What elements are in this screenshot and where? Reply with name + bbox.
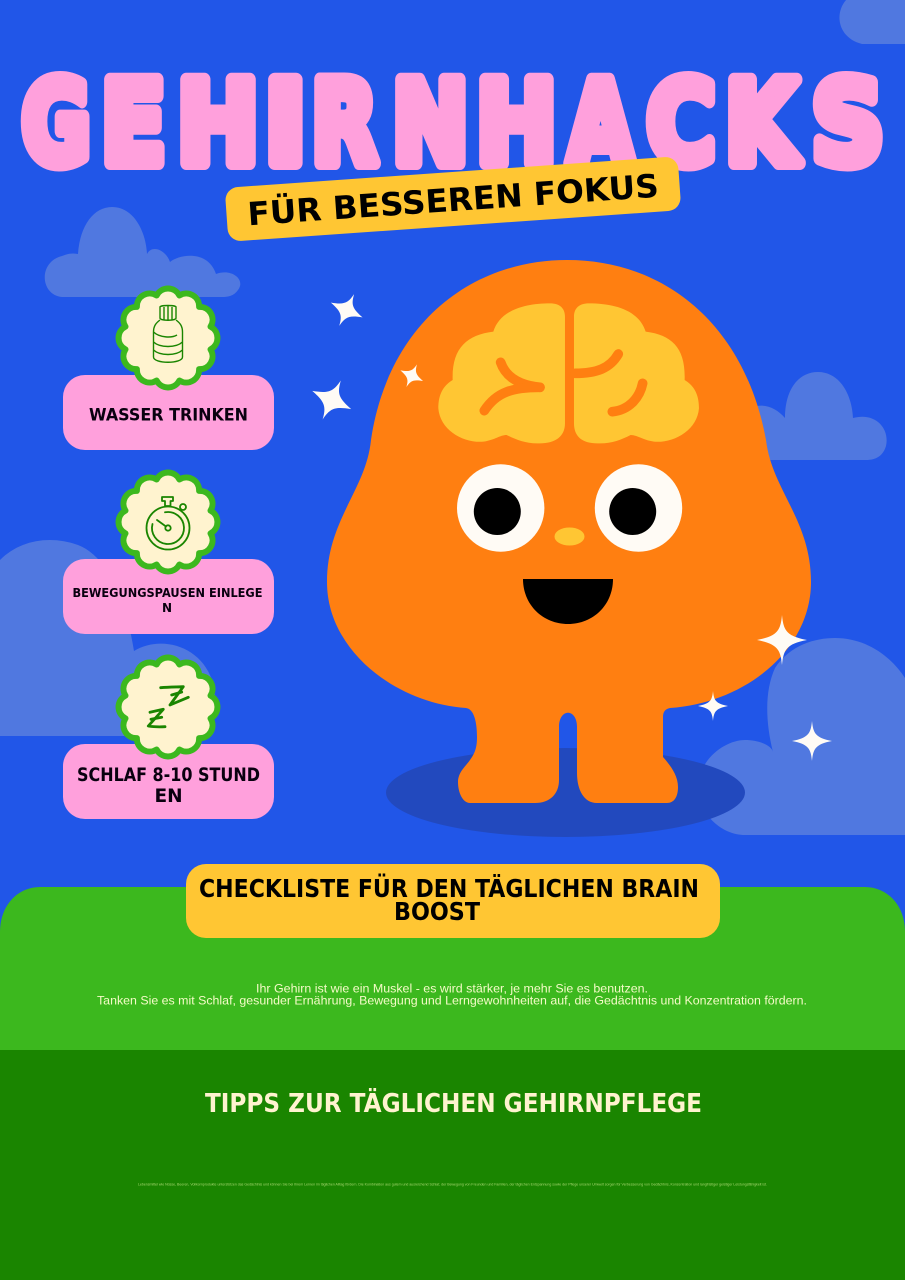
cloud: lower right <box>698 638 905 835</box>
card text: Bewegungspausen: BEWEGUNGSPAUSEN EINLEGE <box>72 586 262 600</box>
cloud: lower left <box>0 540 215 736</box>
right eye <box>595 464 682 552</box>
green section <box>0 887 905 1050</box>
icon: zzz <box>148 687 188 727</box>
card: Schlaf <box>63 744 274 819</box>
brain: left lobe <box>438 303 565 443</box>
card: Wasser trinken <box>63 375 274 450</box>
card text: Bewegungspausen: N <box>162 601 172 615</box>
title: H <box>177 57 259 190</box>
character body <box>327 260 811 803</box>
nose <box>554 528 584 546</box>
badge: sleep <box>119 658 217 756</box>
intro paragraph: Tanken Sie es mit Schlaf, gesunder Ernährung, Bewegung und Lerngewohnheiten auf, die Gedächtnis und Konzentration fördern. <box>97 994 807 1008</box>
title: G <box>22 57 91 190</box>
badge: stopwatch <box>119 473 217 571</box>
left eye <box>457 464 544 552</box>
cloud: upper left <box>45 207 240 297</box>
title: I <box>265 57 306 190</box>
card text: Schlaf: EN <box>154 786 183 807</box>
title: A <box>568 57 633 190</box>
badge: bottle <box>119 289 217 387</box>
sparkles <box>303 287 832 761</box>
title: E <box>101 57 166 190</box>
brain <box>438 303 699 443</box>
mouth <box>523 579 613 624</box>
card text: Wasser trinken: WASSER TRINKEN <box>89 406 248 426</box>
title: C <box>647 57 716 190</box>
title: K <box>725 57 800 190</box>
checklist banner <box>186 864 720 938</box>
title: S <box>812 57 884 190</box>
subtitle text: FÜR BESSEREN FOKUS <box>246 167 660 233</box>
dark green section <box>0 1050 905 1280</box>
card text: Schlaf: SCHLAF 8-10 STUND <box>77 765 260 786</box>
subtitle banner <box>225 156 681 242</box>
cloud: right <box>757 372 887 460</box>
title: N <box>392 57 468 190</box>
icon: stopwatch <box>146 497 190 550</box>
brain: folds <box>484 354 643 412</box>
cloud: top right <box>839 0 905 44</box>
card: Bewegungspausen <box>63 559 274 634</box>
title: H <box>476 57 557 190</box>
brain: right lobe <box>574 303 699 443</box>
tips heading: TIPPS ZUR TÄGLICHEN GEHIRNPFLEGE <box>205 1087 702 1119</box>
checklist heading: BOOST <box>394 897 480 926</box>
intro paragraph: Ihr Gehirn ist wie ein Muskel - es wird stärker, je mehr Sie es benutzen. <box>256 982 648 996</box>
checklist heading: CHECKLISTE FÜR DEN TÄGLICHEN BRAIN <box>199 873 699 903</box>
ground shadow <box>386 748 745 837</box>
fine print: Lebensmittel wie Nüsse, Beeren, Vollkornprodukte unterstützen das Gedächtnis und können Sie bei Ihrem Lernen im täglichen Alltag fördern. Die Kombination aus gutem und ausreichend Schlaf, der Bewegung von Freunden und Familien, der täglichen Entspannung sowie der Pflege unserer Umwelt sorgen für Verbesserung von Gedächtnis, Konzentration und langfristiger geistiger Leistungsfähigkeit ist. <box>138 1182 767 1186</box>
icon: water bottle <box>154 306 182 362</box>
title: R <box>312 57 378 190</box>
